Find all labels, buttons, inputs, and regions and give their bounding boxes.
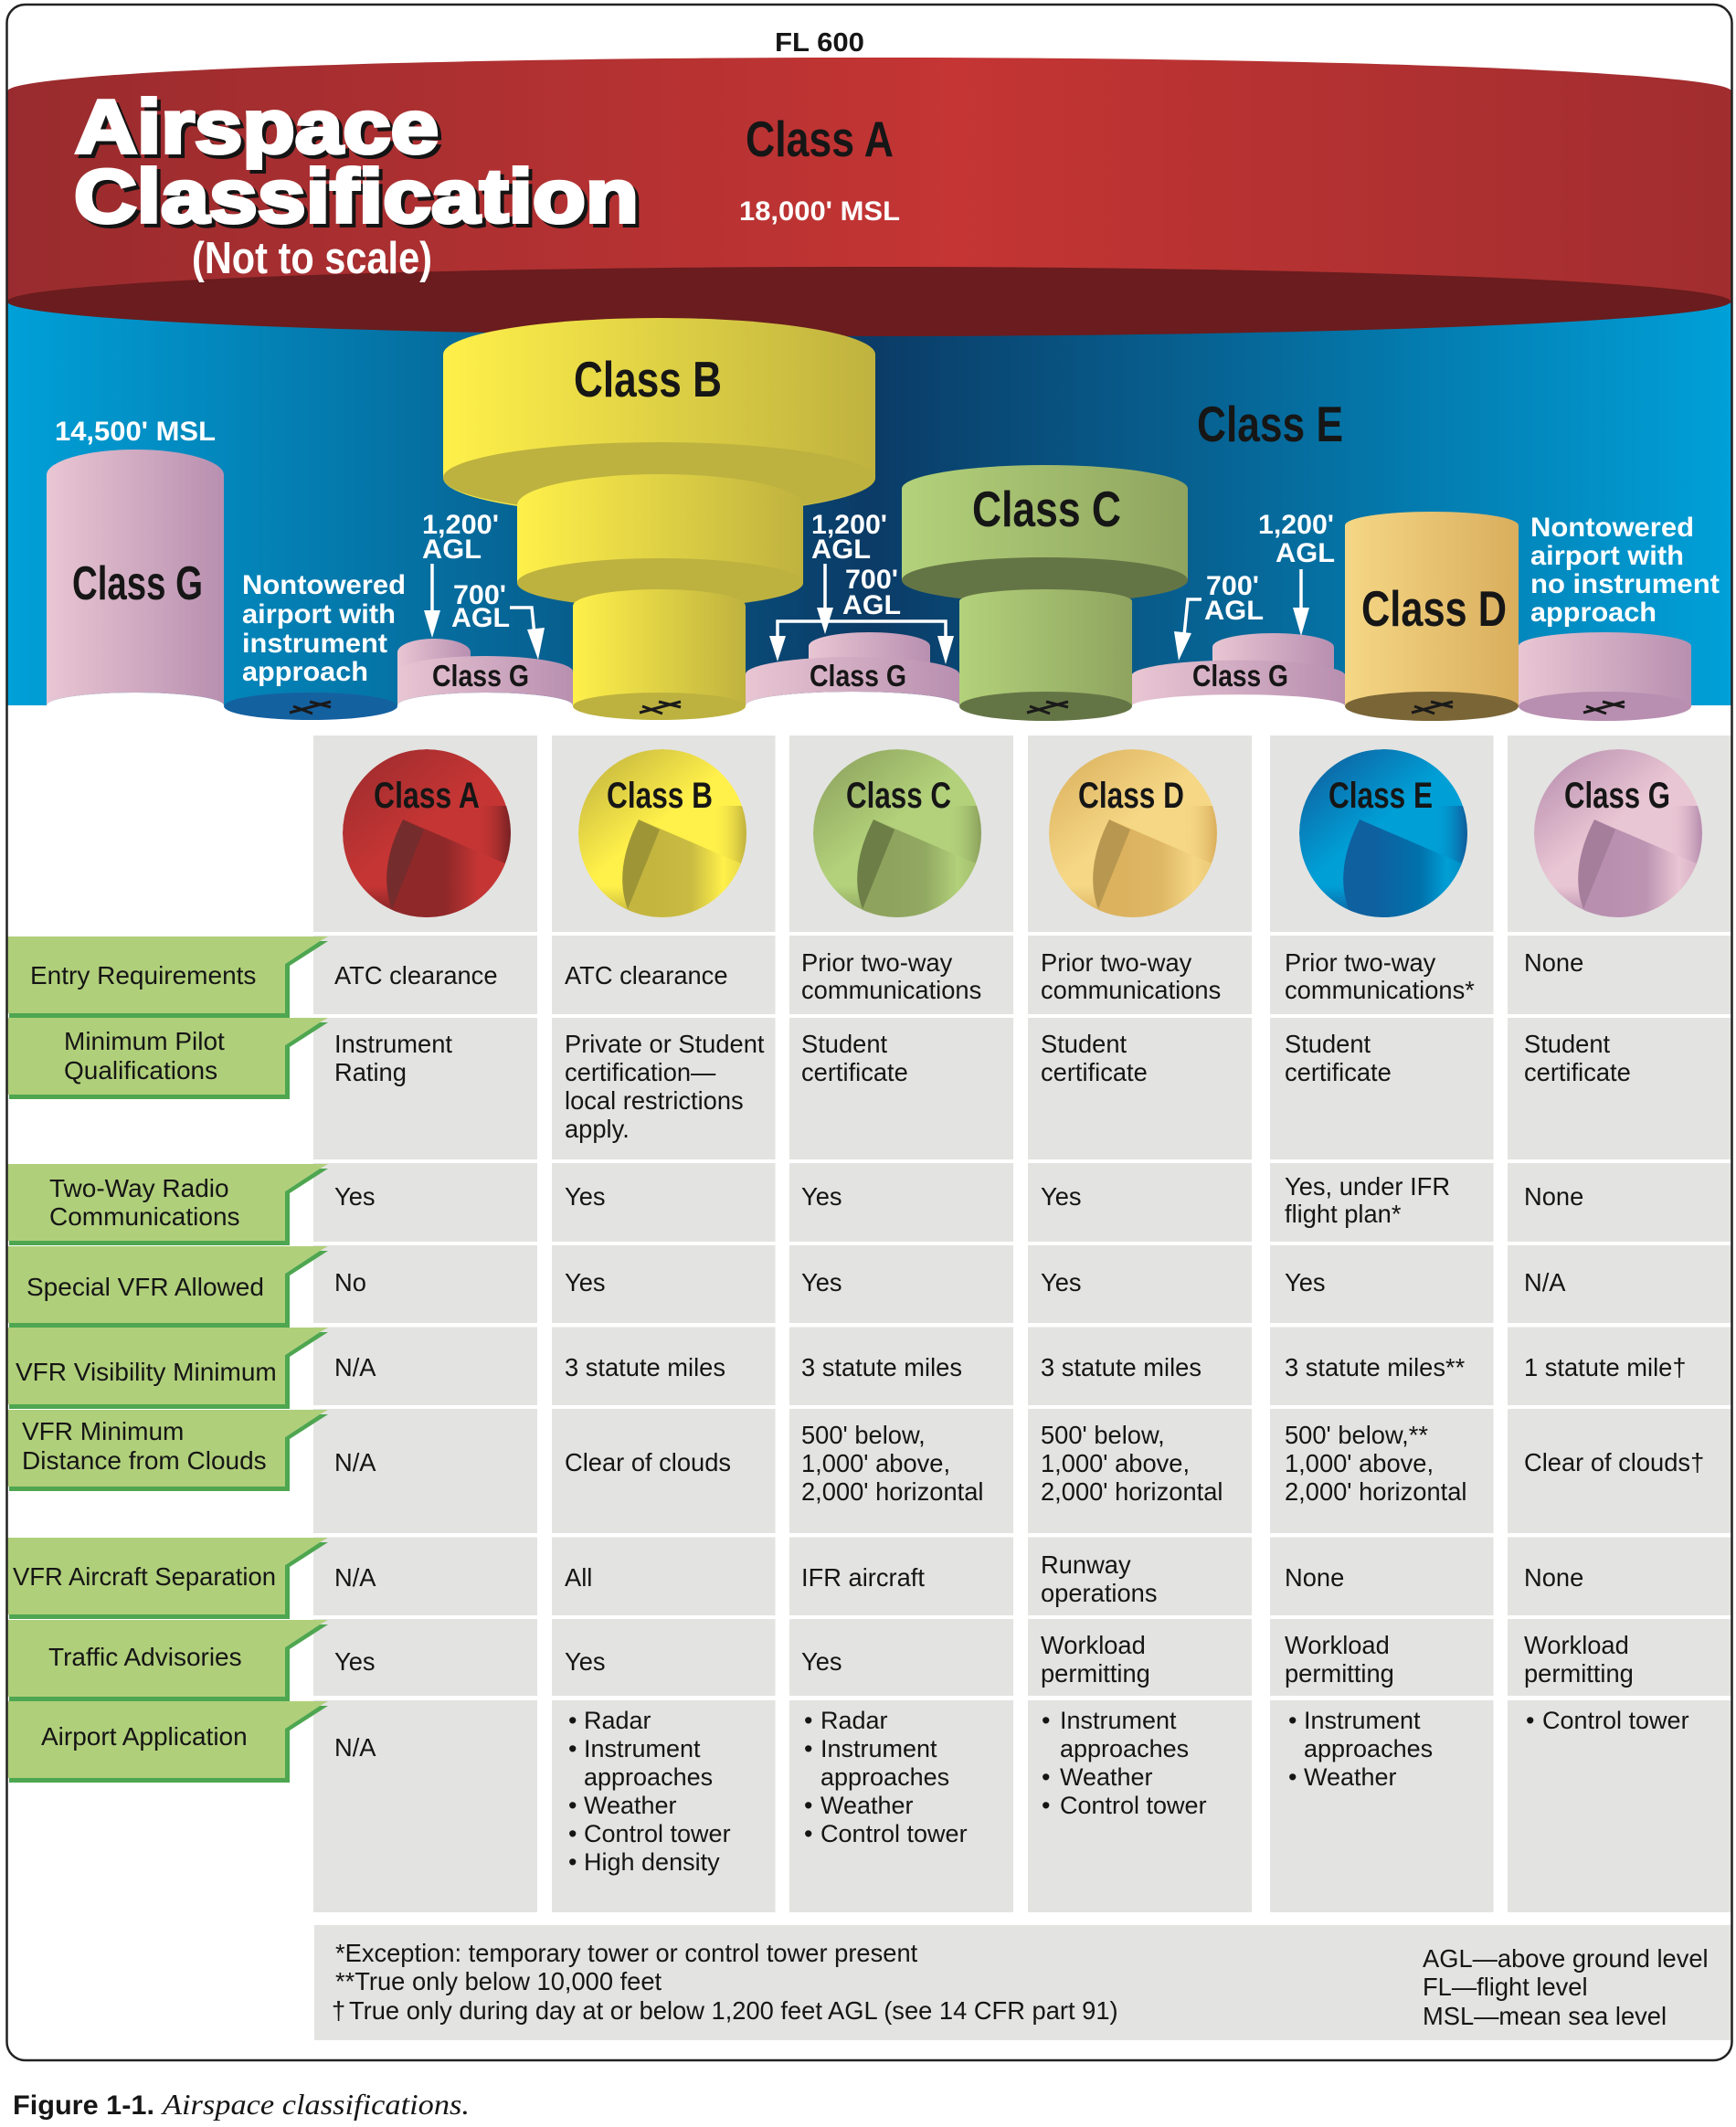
icon: Class C sphere — [813, 749, 989, 925]
row: VFR Minimum Distance from Clouds: 500' below,** — [1285, 1421, 1428, 1449]
title: Airspace Classification: Airspace — [75, 84, 439, 169]
row: Two-Way Radio Communications: Communications — [49, 1202, 240, 1231]
title: Airspace Classification: Classification — [74, 153, 639, 238]
annotation: 1,200 and 700 feet AGL, right: 1,200' — [1258, 510, 1334, 540]
label: 14,500 feet MSL: 14,500' MSL — [55, 417, 216, 447]
annotation: 1,200 and 700 feet AGL, right: 700' — [1206, 571, 1259, 601]
row: Minimum Pilot Qualifications: certificate — [801, 1058, 908, 1086]
row: Two-Way Radio Communications: Yes, under IFR — [1285, 1172, 1450, 1201]
row: Minimum Pilot Qualifications: Qualifications — [64, 1056, 217, 1085]
row: Minimum Pilot Qualifications: Student — [1524, 1030, 1611, 1058]
cylinder: Class C two tiers: Class C — [972, 481, 1121, 537]
caption: figure title — [13, 2088, 470, 2121]
row: Minimum Pilot Qualifications — [7, 1018, 1731, 1159]
row: Minimum Pilot Qualifications: certificate — [1524, 1058, 1631, 1086]
row: VFR Minimum Distance from Clouds: 2,000' horizontal — [1285, 1477, 1466, 1506]
label: Class E: Class E — [1197, 396, 1343, 452]
panel: Class A red disc — [7, 58, 1731, 336]
row: VFR Aircraft Separation: VFR Aircraft Separation — [13, 1562, 276, 1591]
cylinder: tall Class G — [47, 450, 224, 705]
row: Two-Way Radio Communications: Two-Way Radio — [49, 1174, 229, 1202]
text: nontowered airport with no instrument approach: no instrument — [1530, 569, 1720, 599]
subtitle: not to scale: (Not to scale) — [192, 234, 432, 283]
cylinder: Class G between B and C — [746, 632, 959, 705]
text: nontowered airport with instrument approach — [242, 570, 406, 687]
row: VFR Visibility Minimum: 3 statute miles — [801, 1353, 962, 1381]
row: Minimum Pilot Qualifications: apply. — [565, 1115, 630, 1143]
annotation: 1,200 and 700 feet AGL, center — [769, 510, 954, 664]
row: Entry Requirements: None — [1524, 948, 1583, 977]
icon: Class D sphere: Class D — [1078, 776, 1184, 816]
panel: footnotes and abbreviations: *Exception: temporary tower or control tower present — [335, 1939, 918, 1967]
row: VFR Aircraft Separation — [7, 1537, 1731, 1619]
row: Minimum Pilot Qualifications: Rating — [334, 1058, 407, 1086]
text: nontowered airport with no instrument approach: airport with — [1530, 541, 1684, 571]
row: VFR Aircraft Separation: None — [1285, 1563, 1344, 1592]
row: Airport Application: Weather — [584, 1792, 677, 1819]
row: Airport Application: Weather — [820, 1792, 914, 1819]
row: Special VFR Allowed: Yes — [1041, 1268, 1082, 1296]
label: 18,000 feet MSL: 18,000' MSL — [739, 196, 900, 227]
row: Entry Requirements — [7, 936, 1731, 1018]
icon: Class B sphere: Class B — [607, 776, 713, 816]
text: nontowered airport with no instrument approach: Nontowered — [1530, 513, 1694, 543]
row: VFR Visibility Minimum: 3 statute miles — [565, 1353, 725, 1381]
row: Minimum Pilot Qualifications: Minimum Pilot — [64, 1027, 225, 1055]
text: nontowered airport with instrument approach: instrument — [242, 629, 387, 659]
row: Minimum Pilot Qualifications: certificate — [1041, 1058, 1148, 1086]
row: VFR Aircraft Separation: N/A — [334, 1563, 376, 1592]
cylinder: Class G beside Class B, left: Class G — [432, 659, 529, 693]
row: Airport Application: • — [1042, 1792, 1050, 1819]
row: Special VFR Allowed: N/A — [1524, 1268, 1566, 1296]
icon: Class G sphere: Class G — [1564, 776, 1670, 816]
annotation: 1,200 and 700 feet AGL, left: AGL — [451, 603, 510, 633]
row: Airport Application: Radar — [820, 1707, 888, 1734]
row: Traffic Advisories: Workload — [1285, 1631, 1390, 1659]
row: Special VFR Allowed: Yes — [565, 1268, 606, 1296]
row: VFR Visibility Minimum — [7, 1327, 1731, 1409]
panel: footnotes and abbreviations: **True only below 10,000 feet — [335, 1967, 662, 1995]
panel: footnotes and abbreviations — [314, 1925, 1731, 2040]
row: Traffic Advisories: permitting — [1524, 1659, 1634, 1688]
cylinder: Class G between C and D: Class G — [1192, 659, 1288, 693]
cylinder: Class G beside Class B, left — [397, 639, 573, 705]
caption: figure title: Figure 1-1. — [13, 2090, 154, 2121]
row: VFR Visibility Minimum: 3 statute miles — [1041, 1353, 1201, 1381]
row: Minimum Pilot Qualifications: certificate — [1285, 1058, 1392, 1086]
row: Two-Way Radio Communications: flight plan* — [1285, 1200, 1402, 1228]
row: VFR Aircraft Separation: All — [565, 1563, 592, 1592]
row: Airport Application: approaches — [1060, 1735, 1189, 1762]
row: Two-Way Radio Communications: Yes — [1041, 1182, 1082, 1211]
annotation: 1,200 and 700 feet AGL, left — [422, 510, 545, 660]
annotation: 1,200 and 700 feet AGL, right — [1174, 510, 1335, 661]
row: Airport Application: Instrument — [1060, 1707, 1177, 1734]
row: Airport Application: Control tower — [1060, 1792, 1207, 1819]
row: Minimum Pilot Qualifications: Instrument — [334, 1030, 452, 1058]
icon: Class E sphere — [1299, 749, 1475, 925]
row: Entry Requirements: communications — [1041, 976, 1221, 1004]
icon: Class G sphere — [1534, 749, 1710, 925]
panel: footnotes and abbreviations: AGL—above ground level — [1423, 1944, 1709, 1973]
icon: Class A sphere: Class A — [374, 776, 480, 816]
row: VFR Visibility Minimum: VFR Visibility Minimum — [16, 1358, 277, 1386]
row: VFR Visibility Minimum: 1 statute mile† — [1524, 1353, 1687, 1381]
white ground arcs — [47, 692, 1345, 719]
row: Special VFR Allowed — [7, 1245, 1731, 1328]
row: Airport Application: Radar — [584, 1707, 651, 1734]
annotation: 1,200 and 700 feet AGL, left: AGL — [422, 534, 482, 565]
annotation: 1,200 and 700 feet AGL, center: AGL — [842, 590, 901, 620]
text: nontowered airport with no instrument approach: approach — [1530, 598, 1657, 628]
row: Minimum Pilot Qualifications: Private or Student — [565, 1030, 765, 1058]
row: Entry Requirements: Entry Requirements — [30, 961, 256, 989]
row: Airport Application: • — [1526, 1707, 1534, 1734]
row: Airport Application: Weather — [1060, 1763, 1153, 1791]
row: Two-Way Radio Communications: Yes — [565, 1182, 606, 1211]
icon: Class B sphere — [578, 749, 754, 925]
row: Airport Application: Weather — [1304, 1763, 1397, 1791]
row: Entry Requirements: Prior two-way — [1285, 948, 1436, 977]
row: Airport Application: • — [568, 1735, 577, 1762]
row: Airport Application: approaches — [1304, 1735, 1433, 1762]
label: Class A: Class A — [746, 111, 894, 167]
row: VFR Minimum Distance from Clouds: VFR Minimum — [22, 1417, 184, 1445]
row: Special VFR Allowed: Special VFR Allowed — [26, 1273, 264, 1301]
row: Two-Way Radio Communications: None — [1524, 1182, 1583, 1211]
row: Entry Requirements: ATC clearance — [334, 961, 498, 989]
row: Traffic Advisories: permitting — [1041, 1659, 1150, 1688]
row: VFR Minimum Distance from Clouds: 2,000' horizontal — [801, 1477, 983, 1506]
row: VFR Minimum Distance from Clouds: 500' below, — [1041, 1421, 1165, 1449]
row: Special VFR Allowed: No — [334, 1268, 366, 1296]
row: Airport Application: • — [568, 1707, 577, 1734]
text: nontowered airport with instrument approach: airport with — [242, 599, 396, 630]
cylinder: Class B three tiers — [443, 318, 875, 720]
icon: Class D sphere — [1049, 749, 1224, 925]
row: VFR Minimum Distance from Clouds: 1,000' above, — [801, 1449, 950, 1477]
row: Airport Application: Control tower — [584, 1820, 731, 1847]
row: Minimum Pilot Qualifications: certification— — [565, 1058, 716, 1086]
row: Minimum Pilot Qualifications: Student — [1041, 1030, 1127, 1058]
column cells: header row — [313, 735, 1731, 932]
row: VFR Minimum Distance from Clouds: Distance from Clouds — [22, 1446, 267, 1475]
row: Entry Requirements: communications* — [1285, 976, 1475, 1004]
row: VFR Minimum Distance from Clouds: Clear of clouds† — [1524, 1448, 1704, 1476]
row: Traffic Advisories: Workload — [1041, 1631, 1146, 1659]
row: Airport Application: High density — [584, 1848, 720, 1876]
icon: Class E sphere: Class E — [1328, 776, 1433, 816]
icon: Class A sphere — [343, 749, 518, 925]
row: VFR Visibility Minimum: 3 statute miles** — [1285, 1353, 1466, 1381]
row: VFR Minimum Distance from Clouds: 500' below, — [801, 1421, 926, 1449]
annotation: 1,200 and 700 feet AGL, center: 1,200' — [811, 510, 887, 540]
cylinder: Class B three tiers: Class B — [574, 351, 722, 407]
row: VFR Visibility Minimum: N/A — [334, 1353, 376, 1381]
airport: nontowered with instrument approach — [224, 693, 397, 720]
row: Airport Application: • — [804, 1820, 812, 1847]
row: Airport Application: approaches — [820, 1763, 949, 1791]
row: Traffic Advisories: Yes — [801, 1647, 842, 1676]
caption: figure title: Airspace classifications. — [161, 2088, 470, 2121]
row: Airport Application: • — [804, 1735, 812, 1762]
annotation: 1,200 and 700 feet AGL, center: AGL — [811, 534, 871, 565]
row: Airport Application: • — [568, 1792, 577, 1819]
row: VFR Minimum Distance from Clouds — [7, 1409, 1731, 1533]
row: Two-Way Radio Communications — [7, 1163, 1731, 1245]
panel: footnotes and abbreviations: † — [332, 1996, 345, 2025]
row: VFR Minimum Distance from Clouds: 1,000' above, — [1285, 1449, 1434, 1477]
row: Minimum Pilot Qualifications: Student — [1285, 1030, 1371, 1058]
annotation: 1,200 and 700 feet AGL, right: AGL — [1204, 596, 1264, 626]
row: VFR Aircraft Separation: Runway — [1041, 1550, 1131, 1579]
panel: footnotes and abbreviations: FL—flight level — [1423, 1973, 1588, 2001]
row: Airport Application: Control tower — [820, 1820, 968, 1847]
row: Traffic Advisories: Traffic Advisories — [48, 1643, 242, 1671]
row: Airport Application: • — [568, 1820, 577, 1847]
cylinder: Class C two tiers — [902, 465, 1188, 721]
row: Airport Application: • — [804, 1792, 812, 1819]
row: Entry Requirements: Prior two-way — [801, 948, 953, 977]
row: Entry Requirements: Prior two-way — [1041, 948, 1192, 977]
cylinder: Class G between C and D — [1132, 633, 1345, 705]
row: Airport Application: • — [1288, 1763, 1297, 1791]
row: VFR Aircraft Separation: operations — [1041, 1579, 1157, 1607]
row: Airport Application: Instrument — [820, 1735, 937, 1762]
row: Airport Application: • — [1288, 1707, 1297, 1734]
annotation: 1,200 and 700 feet AGL, left: 1,200' — [422, 510, 499, 540]
cylinder: tall Class G: Class G — [72, 557, 203, 610]
row: Traffic Advisories: Yes — [565, 1647, 606, 1676]
row: Airport Application: Instrument — [584, 1735, 701, 1762]
panel: footnotes and abbreviations: True only during day at or below 1,200 feet AGL (see 14 CFR part 91) — [349, 1996, 1118, 2025]
row: Airport Application: approaches — [584, 1763, 713, 1791]
row: Airport Application: • — [568, 1848, 577, 1876]
row: Special VFR Allowed: Yes — [1285, 1268, 1326, 1296]
row: Entry Requirements: ATC clearance — [565, 961, 728, 989]
text: nontowered airport with no instrument approach — [1530, 513, 1720, 628]
row: Special VFR Allowed: Yes — [801, 1268, 842, 1296]
row: Airport Application — [7, 1700, 1731, 1912]
row: Traffic Advisories: permitting — [1285, 1659, 1394, 1688]
row: Airport Application: • — [1042, 1707, 1050, 1734]
row: Airport Application: • — [804, 1707, 812, 1734]
row: VFR Minimum Distance from Clouds: 1,000' above, — [1041, 1449, 1190, 1477]
annotation: 1,200 and 700 feet AGL, center: 700' — [845, 565, 898, 595]
row: VFR Aircraft Separation: IFR aircraft — [801, 1563, 925, 1592]
cylinder: Class G at nontowered airport without approach — [1519, 632, 1691, 721]
cylinder: Class D: Class D — [1361, 580, 1507, 637]
row: Traffic Advisories — [7, 1619, 1731, 1701]
text: nontowered airport with instrument approach: approach — [242, 657, 368, 687]
row: VFR Minimum Distance from Clouds: N/A — [334, 1448, 376, 1476]
row: Minimum Pilot Qualifications: Student — [801, 1030, 888, 1058]
row: Airport Application: N/A — [334, 1733, 376, 1762]
title: Airspace Classification — [74, 84, 639, 238]
cylinder: Class G between B and C: Class G — [810, 659, 906, 693]
row: VFR Minimum Distance from Clouds: 2,000' horizontal — [1041, 1477, 1223, 1506]
row: VFR Minimum Distance from Clouds: Clear of clouds — [565, 1448, 731, 1476]
row: Entry Requirements: communications — [801, 976, 981, 1004]
icon: Class C sphere: Class C — [846, 776, 951, 816]
row: Traffic Advisories: Workload — [1524, 1631, 1629, 1659]
row: Traffic Advisories: Yes — [334, 1647, 376, 1676]
panel: blue Class E airspace background — [7, 302, 1731, 705]
row: Two-Way Radio Communications: Yes — [334, 1182, 376, 1211]
row: Two-Way Radio Communications: Yes — [801, 1182, 842, 1211]
annotation: 1,200 and 700 feet AGL, right: AGL — [1276, 538, 1335, 568]
row: Airport Application: Instrument — [1304, 1707, 1421, 1734]
row: Minimum Pilot Qualifications: local restrictions — [565, 1086, 744, 1115]
cylinder: Class D — [1345, 512, 1519, 721]
row: Airport Application: • — [1042, 1763, 1050, 1791]
label: FL 600: FL 600 — [775, 28, 864, 58]
row: Airport Application: Control tower — [1542, 1707, 1689, 1734]
text: nontowered airport with instrument approach: Nontowered — [242, 570, 406, 600]
panel: footnotes and abbreviations: MSL—mean sea level — [1423, 2002, 1667, 2030]
annotation: 1,200 and 700 feet AGL, left: 700' — [453, 580, 506, 610]
row: VFR Aircraft Separation: None — [1524, 1563, 1583, 1592]
row: Airport Application: Airport Application — [41, 1722, 248, 1751]
